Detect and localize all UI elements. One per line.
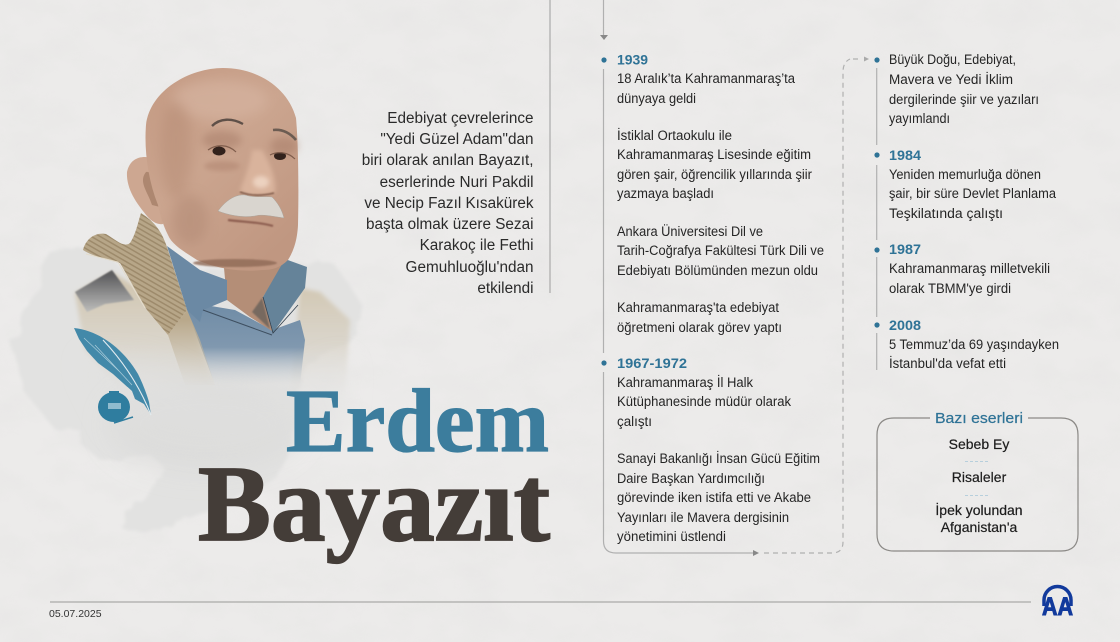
timeline connectors and arrows xyxy=(600,0,877,556)
timeline column 2: Teşkilatında çalıştı xyxy=(889,206,1003,221)
timeline column 1: çalıştı xyxy=(617,414,652,429)
timeline column 1: Kahramanmaraş İl Halk xyxy=(617,375,753,390)
work titles: Risaleler xyxy=(952,469,1007,485)
panel: selected works xyxy=(877,410,1078,551)
intro text block: başta olmak üzere Sezai xyxy=(366,216,534,233)
timeline column 1: Sanayi Bakanlığı İnsan Gücü Eğitim xyxy=(617,451,820,466)
timeline column 1: dünyaya geldi xyxy=(617,91,696,106)
timeline column 1: 18 Aralık’ta Kahramanmaraş’ta xyxy=(617,71,796,86)
timeline column 1: Kahramanmaraş'ta edebiyat xyxy=(617,300,779,315)
footer rule xyxy=(50,601,1031,603)
title: Erdem Bayazıt: Erdem xyxy=(286,372,549,471)
timeline column 1: Kahramanmaraş Lisesinde eğitim xyxy=(617,147,811,162)
mouth xyxy=(228,220,273,226)
logo: Anadolu Agency: AA xyxy=(1042,593,1073,621)
work titles: Sebeb Ey xyxy=(949,436,1009,452)
eye sockets xyxy=(202,131,242,149)
intro text block: etkilendi xyxy=(477,280,534,297)
timeline column 2: dergilerinde şiir ve yazıları xyxy=(889,92,1039,107)
timeline column 2: İstanbul'da vefat etti xyxy=(889,356,1006,371)
timeline column 1: Ankara Üniversitesi Dil ve xyxy=(617,224,763,239)
title: Erdem Bayazıt xyxy=(198,372,550,564)
timeline column 2: 1984 xyxy=(889,147,921,163)
work titles: Afganistan'a xyxy=(941,519,1018,535)
timeline column 2: 1987 xyxy=(889,241,921,257)
forehead highlight xyxy=(172,80,268,120)
timeline column 2: 2008 xyxy=(889,317,921,333)
watercolor wash behind portrait xyxy=(13,243,367,530)
timeline column 1: görevinde iken istifa etti ve Akabe xyxy=(617,490,811,505)
intro text block: "Yedi Güzel Adam"dan xyxy=(380,131,534,148)
dark shoulder shadow xyxy=(75,270,134,312)
date: 05.07.2025 xyxy=(49,608,102,620)
timeline column 1: Kütüphanesinde müdür olarak xyxy=(617,394,791,409)
timeline column 1: 1967-1972 xyxy=(617,355,687,371)
timeline column 1: öğretmeni olarak görev yaptı xyxy=(617,320,782,335)
eyes xyxy=(212,146,226,156)
icon: feather and inkwell xyxy=(74,328,151,423)
cardigan front band xyxy=(168,310,215,385)
intro text block: Edebiyat çevrelerince xyxy=(387,110,534,127)
timeline column 2: olarak TBMM'ye girdi xyxy=(889,281,1011,296)
timeline column 2: Yeniden memurluğa dönen xyxy=(889,167,1041,182)
work titles xyxy=(935,436,1023,535)
timeline column 2: Büyük Doğu, Edebiyat, xyxy=(889,52,1016,67)
nose xyxy=(240,150,275,196)
timeline column 1: Daire Başkan Yardımcılığı xyxy=(617,471,765,486)
intro text block xyxy=(362,110,534,297)
title: Erdem Bayazıt: Bayazıt xyxy=(198,445,550,564)
intro text block: Gemuhluoğlu'ndan xyxy=(406,259,534,276)
timeline column 2: şair, bir süre Devlet Planlama xyxy=(889,186,1057,201)
timeline column 1: İstiklal Ortaokulu ile xyxy=(617,128,732,143)
jacket left body xyxy=(75,272,215,400)
intro text block: ve Necip Fazıl Kısakürek xyxy=(364,195,534,212)
timeline column 1 xyxy=(617,52,824,544)
work titles: İpek yolundan xyxy=(935,501,1023,518)
mist over lower portrait xyxy=(85,360,345,450)
cardigan collar xyxy=(83,213,187,335)
timeline column 1: yazmaya başladı xyxy=(617,186,714,201)
intro text block: eserlerinde Nuri Pakdil xyxy=(380,174,534,191)
timeline dots xyxy=(601,57,880,366)
heading: Bazı eserleri: Bazı eserleri xyxy=(935,410,1023,427)
moustache xyxy=(218,195,284,218)
shirt collars xyxy=(167,246,227,322)
timeline column 1: 1939 xyxy=(617,52,648,68)
intro text block: biri olarak anılan Bayazıt, xyxy=(362,152,534,169)
timeline column 1: gören şair, öğrencilik yıllarında şiir xyxy=(617,167,813,182)
side shading xyxy=(160,100,192,200)
portrait of Erdem Bayazıt xyxy=(75,68,350,450)
timeline column 1: Edebiyatı Bölümünden mezun oldu xyxy=(617,263,818,278)
timeline column 2: 5 Temmuz’da 69 yaşındayken xyxy=(889,337,1059,352)
timeline column 1: Yayınları ile Mavera dergisinin xyxy=(617,510,789,525)
timeline column 2: Kahramanmaraş milletvekili xyxy=(889,261,1050,276)
intro text block: Karakoç ile Fethi xyxy=(420,237,534,254)
timeline column 1: yönetimini üstlendi xyxy=(617,529,726,544)
timeline column 2: Mavera ve Yedi İklim xyxy=(889,72,1013,87)
timeline column 1: Tarih-Coğrafya Fakültesi Türk Dili ve xyxy=(617,243,824,258)
timeline column 2: yayımlandı xyxy=(889,111,950,126)
eyebrows xyxy=(212,120,243,126)
divider line beside intro xyxy=(549,0,551,293)
neck xyxy=(224,258,287,331)
shirt xyxy=(187,305,305,385)
ear xyxy=(127,157,163,224)
timeline column 2 xyxy=(889,52,1059,371)
jacket right body xyxy=(290,288,350,395)
head xyxy=(146,68,298,271)
